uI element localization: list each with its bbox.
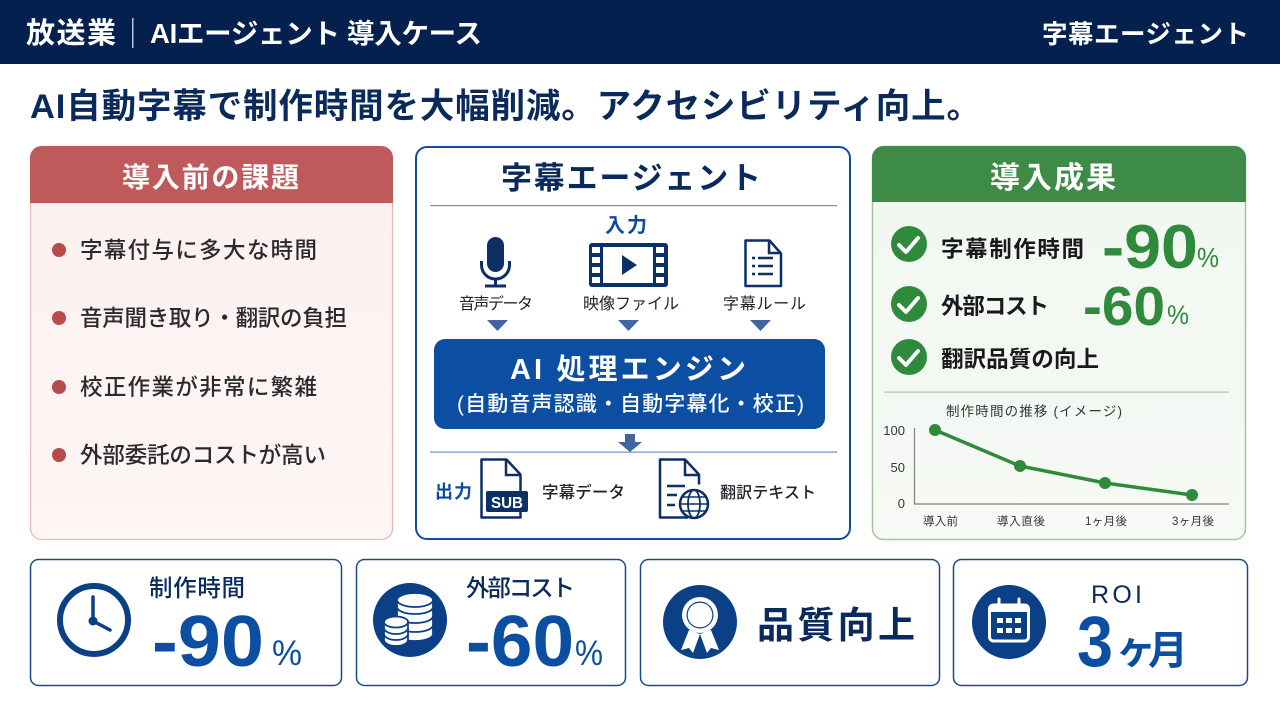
input labels — [459, 294, 806, 313]
icon: award ribbon — [663, 585, 737, 659]
line chart: production time trend: 1ヶ月後 — [1085, 514, 1128, 528]
challenge list: 音声聞き取り・翻訳の負担 — [80, 306, 347, 331]
KPI card: quality improvement: 品質向上 — [757, 605, 915, 646]
panel heading: challenges: 導入前の課題 — [122, 162, 299, 193]
AI engine box: AI 処理エンジン — [510, 353, 746, 386]
output label: subtitle data: 字幕データ — [542, 482, 625, 502]
result: subtitle production time: 字幕制作時間 — [941, 237, 1084, 262]
result: external cost: -60 — [1083, 275, 1165, 337]
header title: AIエージェント 導入ケース — [150, 18, 482, 49]
icon: coins — [373, 583, 447, 657]
input label: 入力 — [605, 214, 647, 237]
result: subtitle production time: -90 — [1102, 213, 1198, 282]
KPI card: production time: 制作時間 — [149, 575, 245, 601]
KPI card: ROI: 月 — [1148, 629, 1188, 673]
icon: rule document — [746, 240, 781, 286]
input labels: 音声データ — [459, 294, 533, 313]
header title: 放送業 — [26, 17, 116, 50]
icon: microphone — [482, 237, 510, 286]
line chart: production time trend: 導入前 — [923, 514, 958, 528]
KPI card: external cost: -60 — [466, 602, 574, 682]
result: external cost: 外部コスト — [941, 294, 1049, 319]
challenge list: 校正作業が非常に繁雑 — [80, 375, 317, 400]
KPI card: external cost: % — [575, 634, 603, 673]
KPI card: quality improvement — [640, 560, 940, 686]
main headline: AI自動字幕で制作時間を大幅削減。アクセシビリティ向上。 — [30, 88, 981, 126]
result: subtitle production time — [891, 213, 1219, 282]
panel heading: results — [872, 146, 1246, 202]
line chart: production time trend: 100 — [883, 423, 905, 438]
line chart: production time trend: 制作時間の推移 (イメージ) — [946, 404, 1122, 419]
AI engine box: (自動音声認識・自動字幕化・校正) — [457, 393, 804, 416]
result: translation quality: 翻訳品質の向上 — [941, 347, 1099, 372]
KPI card: ROI: ヶ — [1116, 628, 1156, 672]
panel: subtitle agent — [416, 147, 850, 539]
line chart: production time trend: 0 — [898, 496, 905, 511]
panel: challenges before adoption — [30, 146, 393, 540]
AI engine box — [434, 339, 825, 429]
icon: clock — [60, 586, 128, 654]
KPI card: ROI — [954, 560, 1248, 686]
KPI card: production time: % — [272, 634, 302, 673]
KPI card: external cost — [356, 560, 626, 686]
line chart: production time trend — [883, 404, 1229, 528]
result: subtitle production time: % — [1197, 242, 1219, 273]
line chart: production time trend: 3ヶ月後 — [1172, 514, 1214, 528]
header bar — [0, 0, 1280, 64]
KPI card: ROI: 3 — [1077, 603, 1113, 682]
header title — [26, 17, 482, 50]
result: external cost — [891, 275, 1189, 337]
challenge list: 字幕付与に多大な時間 — [80, 238, 317, 263]
line chart: production time trend: 50 — [891, 460, 905, 475]
challenge list — [52, 238, 347, 468]
icon: calendar — [972, 585, 1046, 659]
KPI card: ROI: ROI — [1091, 581, 1142, 609]
line chart: production time trend: 導入直後 — [997, 514, 1046, 528]
icon: SUB file — [482, 460, 528, 518]
output label: 出力 — [435, 482, 472, 502]
icon: translated document with globe — [660, 460, 708, 518]
panel heading: challenges — [30, 146, 393, 203]
icon: SUB file: SUB — [491, 495, 523, 512]
challenge list: 外部委託のコストが高い — [80, 443, 326, 468]
input labels: 映像ファイル — [583, 295, 679, 313]
result: translation quality — [891, 339, 1099, 375]
result: external cost: % — [1167, 300, 1189, 330]
panel: results — [872, 146, 1246, 540]
KPI card: production time: -90 — [152, 602, 264, 682]
arrows: inputs to engine — [487, 320, 771, 331]
panel heading: results: 導入成果 — [990, 162, 1116, 195]
icon: film — [589, 243, 668, 287]
KPI card: external cost: 外部コスト — [466, 575, 575, 601]
header agent name: 字幕エージェント — [1042, 21, 1249, 49]
agent heading: 字幕エージェント — [501, 161, 761, 196]
KPI card: production time — [30, 560, 342, 686]
output label: translated text: 翻訳テキスト — [720, 484, 816, 502]
input labels: 字幕ルール — [723, 295, 806, 313]
arrow: engine to output — [618, 434, 642, 452]
